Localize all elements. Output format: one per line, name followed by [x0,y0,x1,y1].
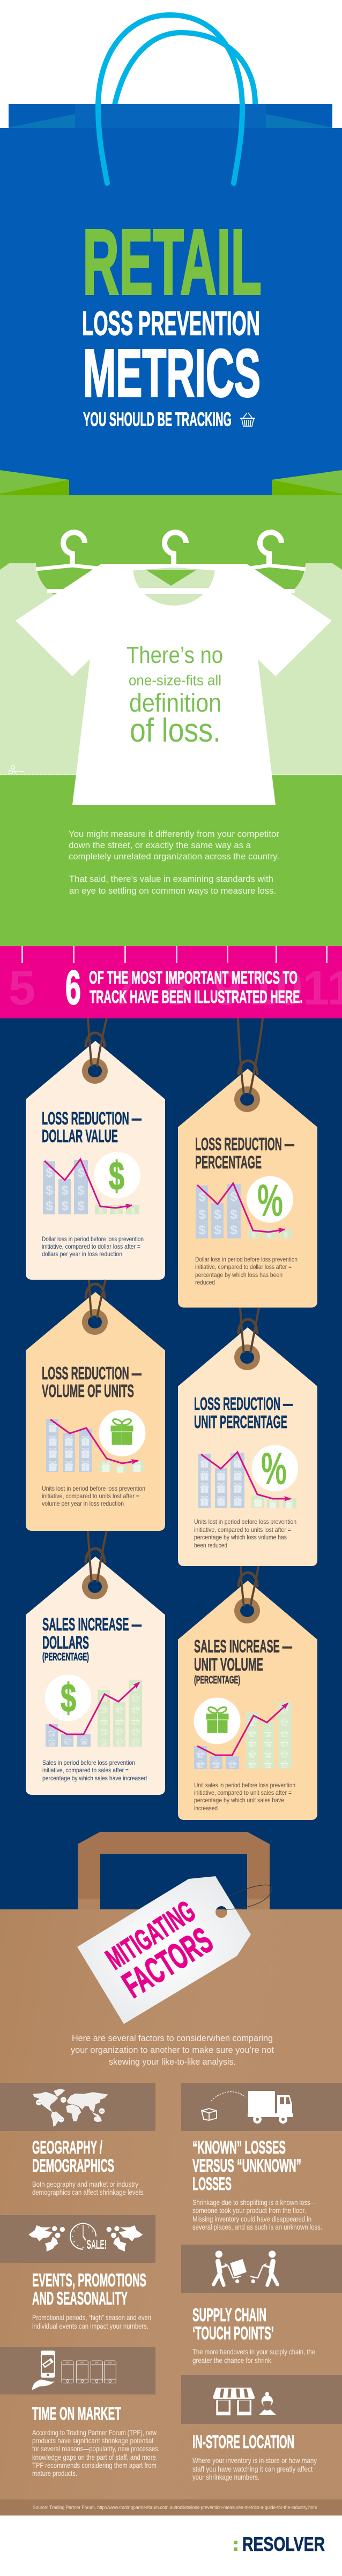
text: time on market: knowledge gaps on the part of staff, and more. [32,2453,158,2461]
band: events [0,2215,155,2263]
chart: $ [267,1230,271,1239]
banner heading [65,961,303,1015]
chart: $ [77,1183,85,1198]
panel: green clothing section [0,470,342,946]
heading: UNIT VOLUME [194,1655,263,1674]
text: in-store location [192,2432,317,2481]
description: Units lost in period before loss prevention [194,1518,296,1525]
chart: $ [214,1207,221,1222]
chart [45,1675,142,1747]
handle base [78,1899,270,1909]
chart [194,1697,292,1769]
chart: $ [46,1199,53,1213]
description: Dollar loss in period before loss prevention [195,1256,298,1263]
band: known losses [181,2083,342,2131]
description: increased [194,1804,218,1812]
bag handles [98,15,255,183]
description: initiative, compared to dollar loss after = [195,1263,292,1271]
chart: $ [131,1206,135,1215]
description [42,1485,145,1507]
text: time on market [32,2404,160,2477]
text: events: Promotional periods, “high” season and even [32,2313,151,2322]
description [194,1781,295,1812]
text: known losses [192,2137,322,2231]
heading: DOLLAR VALUE [42,1126,118,1146]
text: supply chain [192,2305,315,2365]
intro text: down the street, or exactly the same way as a [69,840,251,850]
heading: (PERCENTAGE) [42,1651,89,1663]
icon: world map: 72% [61,2098,66,2101]
title [82,210,262,430]
text: known losses: someone took your product from the floor. [192,2206,306,2215]
text: time on market: TIME ON MARKET [32,2404,121,2424]
text: events [32,2270,151,2330]
chart: $ [99,1206,103,1215]
ruler numbers: 9 [214,962,241,1015]
text: known losses: Missing inventory could have disappeared in [192,2215,311,2223]
text: supply chain: The more handovers in your supply chain, the [192,2347,315,2356]
banner heading: 6 [65,961,81,1015]
chart: $ [114,1206,118,1215]
icon: world map: 34% [36,2101,41,2104]
text: time on market: for several reasons—popularity, new processes, [32,2444,160,2453]
text: events: EVENTS, PROMOTIONS [32,2270,146,2291]
chart: $ [284,1230,288,1239]
chart: $ [251,1230,256,1239]
chart [198,1444,298,1508]
text: in-store location: Where your inventory is in-store or how many [192,2456,317,2465]
description: initiative, compared to units lost after = [194,1526,291,1533]
text: time on market: TPF recommends considering them apart from [32,2461,157,2469]
intro text: That said, there’s value in examining standards with [69,874,273,884]
icon: scissors [9,766,24,775]
band: geography [0,2083,155,2131]
text: geography: GEOGRAPHY / [32,2137,102,2158]
ruler numbers: 8 [163,962,190,1015]
cut line [0,774,342,775]
ruler numbers: 10 [249,962,303,1015]
shirt neck [133,568,215,606]
icon: truck and box [202,2091,293,2124]
text: time on market: According to Trading Partner Forum (TPF), new [32,2428,157,2437]
shirt text: of loss. [130,712,221,749]
chart: $ [230,1190,237,1204]
tag: loss reduction dollar value [26,1018,165,1280]
shirt text: There’s no [127,642,223,668]
icon: world map [33,2089,108,2127]
text: supply chain: ‘TOUCH POINTS’ [192,2323,274,2344]
back shirt right [251,563,342,775]
white gift tag: MITIGATING [100,1894,201,1976]
chart: $ [61,1199,69,1213]
chart [196,1175,293,1239]
description: initiative, compared to dollar loss after = [42,1243,140,1250]
description: percentage by which sales have increased [42,1774,147,1782]
intro text: an eye to settling on common ways to measure loss. [69,886,276,896]
shirt text: definition [129,689,221,717]
chart: $ [46,1166,53,1180]
icon: delivery workers [213,2250,278,2285]
ruler ticks [21,946,328,963]
text: time on market: mature products. [32,2469,77,2477]
chart: $ [198,1223,206,1237]
heading [42,1108,142,1146]
description: Unit sales in period before loss prevention [194,1781,295,1789]
chart: $ [61,1183,69,1198]
bag handles front [98,104,242,183]
tag: sales increase unit volume [178,1566,317,1820]
chart: $ [109,1153,124,1198]
tag: loss reduction percentage [178,1018,317,1308]
panel: shopping bag cover [0,15,342,495]
chart: $ [198,1207,206,1222]
description [42,1759,147,1782]
bag body [0,1909,342,2515]
shirt text [127,642,223,749]
description: Units lost in period before loss prevention [42,1485,145,1492]
chart: $ [46,1183,53,1198]
heading: (PERCENTAGE) [194,1674,240,1686]
chart: $ [77,1166,85,1180]
description: reduced [195,1279,215,1286]
text: geography: demographics can affect shrinkage levels. [32,2188,145,2196]
icon: holly, clock and sale [28,2224,143,2252]
heading: PERCENTAGE [195,1152,262,1172]
band: supply chain [181,2245,342,2293]
description [42,1235,144,1258]
intro text [69,829,279,896]
tag: sales increase dollars [26,1531,165,1795]
icon: world map: 57% [100,2110,104,2112]
hangers [36,532,306,569]
text: in-store location: your shrinkage numbers. [192,2473,259,2481]
chart: $ [230,1223,237,1237]
white gift tag [77,1876,272,2024]
ruler numbers [9,962,342,1015]
heading [195,1134,294,1172]
description: Sales in period before loss prevention [42,1759,135,1766]
text: in-store location: staff you have watching it can greatly affect [192,2465,313,2473]
heading [194,1636,292,1686]
heading: SALES INCREASE — [42,1614,142,1634]
description: percentage by which loss has been [195,1271,282,1279]
intro text [71,2033,274,2067]
intro text: Here are several factors to considerwhen comparing [72,2033,273,2043]
main t-shirt [16,564,332,805]
text: supply chain: SUPPLY CHAIN [192,2305,266,2325]
panel: brown bag mitigating factors [0,1832,342,2515]
description: initiative, compared to unit sales after = [194,1789,292,1796]
text: geography: DEMOGRAPHICS [32,2156,114,2176]
chart: $ [214,1223,221,1237]
icon: basket [240,413,255,426]
icon: holly, clock and sale: SALE! [87,2238,107,2252]
description: percentage by which unit sales have [194,1796,284,1804]
bag bottom folds [0,470,342,495]
description [194,1518,296,1549]
chart: $ [77,1199,85,1213]
heading: VOLUME OF UNITS [42,1381,134,1401]
band: in-store location [181,2375,342,2424]
chart: $ [61,1675,76,1720]
chart [46,1410,146,1473]
text: geography: Both geography and market or industry [32,2180,138,2188]
text: geography [32,2137,145,2196]
intro text: completely unrelated organization across the country. [69,851,279,862]
heading: DOLLARS [42,1633,89,1652]
icon: phones and hand [32,2351,116,2390]
band: time on market [0,2347,155,2394]
heading [42,1614,142,1663]
description: initiative, compared to units lost after = [42,1492,139,1500]
description: initiative, compared to sales after = [42,1766,129,1774]
ruler numbers: 5 [9,962,35,1015]
chart: % [257,1175,283,1226]
heading [194,1394,293,1432]
bag back flap [9,104,332,129]
heading: LOSS REDUCTION — [42,1108,142,1128]
back hanger bars [47,589,295,593]
chart: $ [230,1207,237,1222]
text: known losses: Shrinkage due to shoplifting is a known loss— [192,2198,316,2207]
chart [43,1152,140,1215]
description: percentage by which loss volume has [194,1533,287,1541]
description: volume per year in loss reduction [42,1500,124,1507]
icon: store and clerk [213,2388,276,2415]
text: events: individual events can impact your numbers. [32,2322,148,2330]
shirt text: one-size-fits all [129,672,221,689]
description [195,1256,298,1286]
description: Dollar loss in period before loss prevention [42,1235,144,1243]
heading: LOSS REDUCTION — [42,1363,142,1383]
tag: loss reduction volume of units [26,1280,165,1531]
description: dollars per year in loss reduction [42,1250,122,1258]
back shirt left [0,563,91,775]
intro text: your organization to another to make sure you’re not [71,2045,274,2055]
chart: $ [198,1190,206,1204]
ruler numbers: 7 [111,962,138,1015]
tag: loss reduction unit percentage [178,1308,317,1566]
heading [42,1363,142,1401]
description: been reduced [194,1542,227,1549]
panel: pink ruler banner [0,946,342,1018]
source band [0,2499,342,2515]
icon: world map: 37% [59,2118,63,2121]
text: events: AND SEASONALITY [32,2288,128,2309]
intro text: skewing your like-to-like analysis. [109,2057,236,2067]
white gift tag: FACTORS [116,1920,219,2006]
text: time on market: products have significant shrinkage potential [32,2436,153,2445]
text: known losses: LOSSES [192,2174,232,2194]
panel: navy metrics background [0,1018,342,1909]
intro text: You might measure it differently from your competitor [69,829,279,839]
bag body [0,128,342,495]
chart: % [261,1444,287,1494]
text: supply chain: greater the chance for shrink. [192,2356,273,2365]
bag handle [78,1832,270,1909]
